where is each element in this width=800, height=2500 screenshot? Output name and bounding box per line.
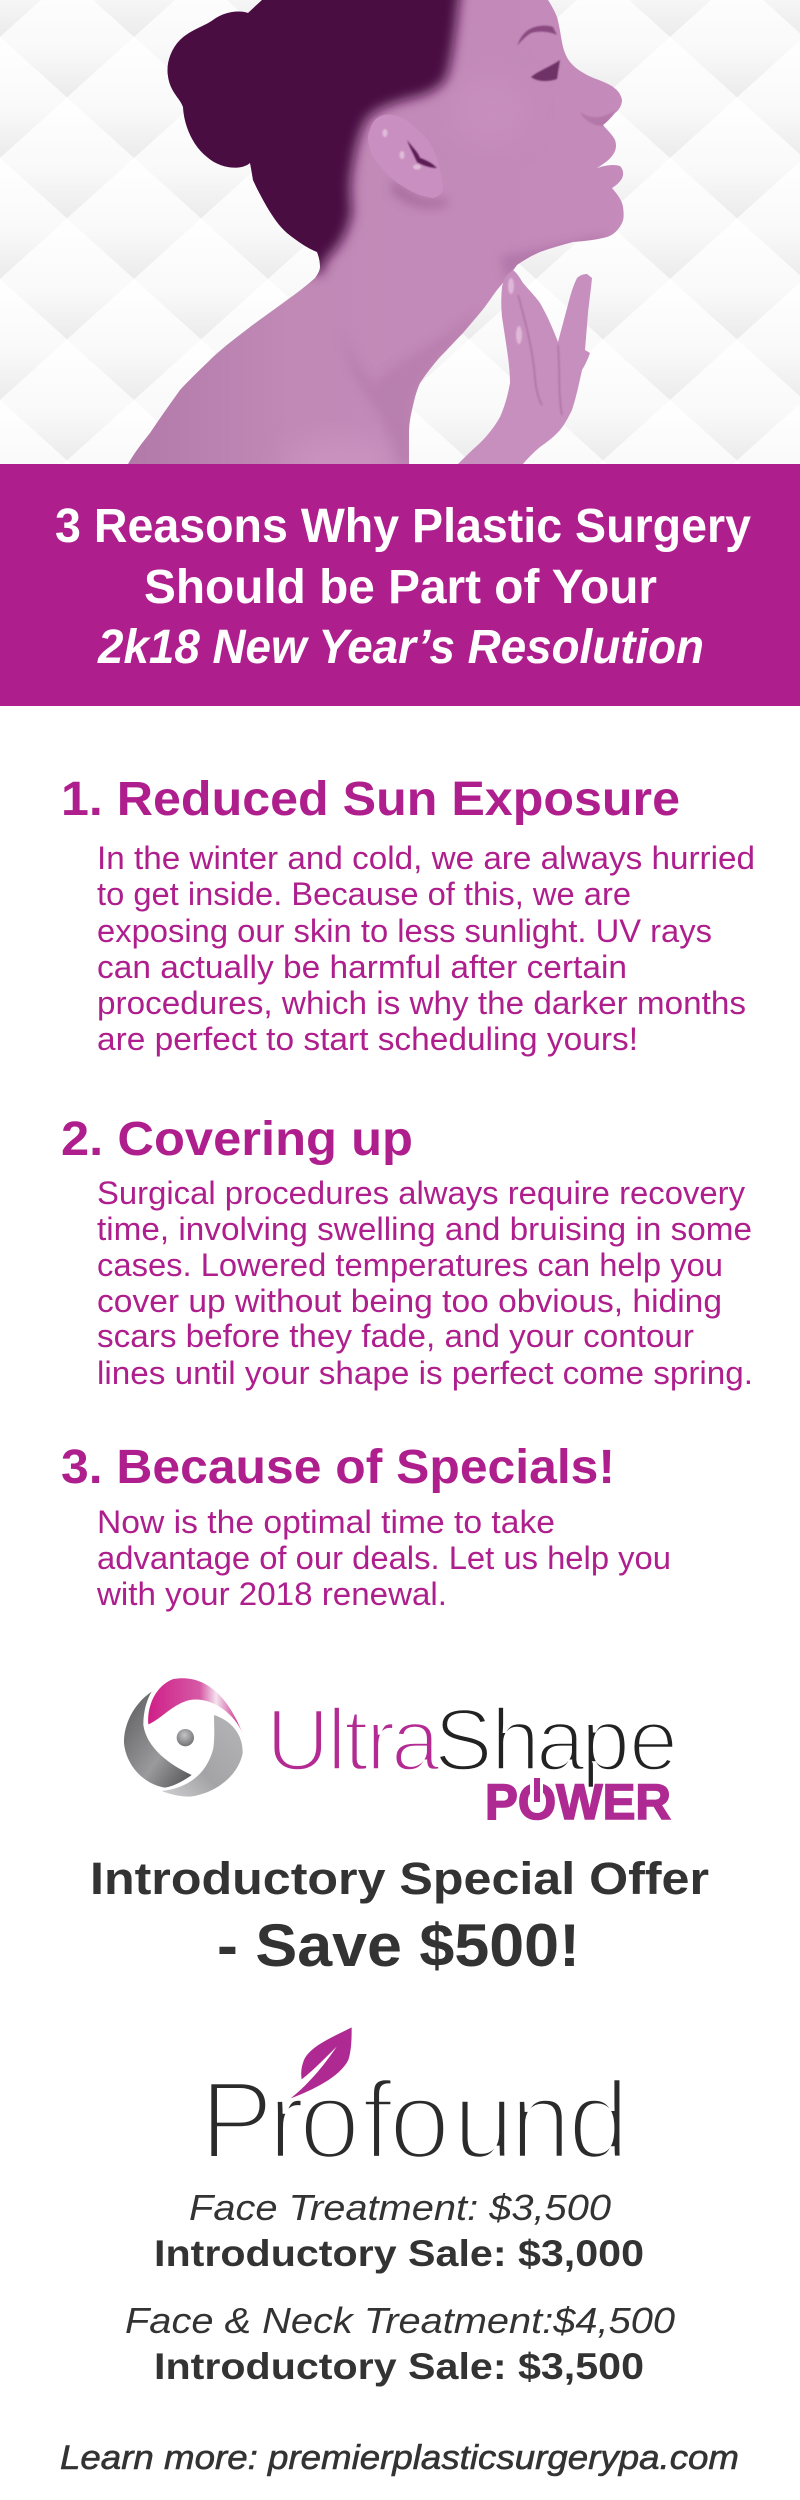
icon: power symbol on the O — [530, 1777, 543, 1805]
hero image: woman in profile on quilted background — [0, 0, 800, 487]
body: reason 3: Now is the optimal time to take — [97, 1504, 555, 1540]
body: reason 3: with your 2018 renewal. — [96, 1576, 447, 1612]
body: reason 2: cases. Lowered temperatures can help you — [97, 1247, 723, 1283]
title banner — [0, 464, 800, 706]
body: reason 1: are perfect to start scheduling yours! — [97, 1021, 638, 1057]
body: reason 2: cover up without being too obvious, hiding — [97, 1283, 722, 1319]
eye — [531, 60, 560, 81]
cheek highlight — [450, 75, 530, 145]
savings line: - Save $500! — [217, 1912, 580, 1979]
face introductory sale: Introductory Sale: $3,000 — [154, 2233, 644, 2274]
body: reason 3: advantage of our deals. Let us help you — [97, 1540, 671, 1576]
reason 1 — [61, 773, 755, 1057]
body: reason 1: can actually be harmful after certain — [97, 949, 627, 985]
neck crease shading — [362, 330, 466, 460]
body: reason 1: to get inside. Because of this, we are — [97, 876, 631, 912]
title text — [55, 500, 751, 674]
offer line: Introductory Special Offer — [90, 1853, 709, 1904]
illustration: woman's head and shoulders — [128, 0, 624, 464]
footer link: Learn more: premierplasticsurgerypa.com — [60, 2439, 739, 2477]
face treatment price: Face Treatment: $3,500 — [189, 2187, 611, 2228]
UltraShape offer — [90, 1853, 709, 1979]
body: reason 2: scars before they fade, and your contour — [97, 1318, 694, 1354]
body: reason 2: lines until your shape is perfect come spring. — [97, 1355, 753, 1391]
hair — [150, 0, 465, 275]
body: reason 3 — [96, 1504, 671, 1612]
wordmark: POWER: POWER — [485, 1774, 671, 1830]
Profound pricing — [125, 2187, 675, 2387]
body: reason 2: time, involving swelling and bruising in some — [97, 1211, 752, 1247]
icon: UltraShape swirl — [124, 1678, 243, 1797]
finger creases — [518, 295, 562, 415]
wordmark: Shape: Shape — [434, 1690, 678, 1789]
ear fold — [407, 140, 437, 168]
shoulder highlight — [320, 455, 360, 464]
title text: 3 Reasons Why Plastic Surgery — [55, 500, 751, 553]
hand — [458, 270, 592, 464]
face and neck treatment price: Face & Neck Treatment:$4,500 — [125, 2300, 675, 2341]
body: reason 2 — [97, 1175, 753, 1391]
wordmark: Profound: Profound — [200, 2059, 629, 2182]
body: reason 1: In the winter and cold, we are always hurried — [97, 840, 755, 876]
wordmark: Ultra: Ultra — [266, 1690, 440, 1789]
under-jaw shadow — [501, 236, 604, 276]
ear highlights — [382, 129, 421, 170]
body: reason 1: exposing our skin to less sunlight. UV rays — [97, 913, 712, 949]
eyebrow — [517, 26, 557, 46]
under-nose shadow — [581, 112, 614, 126]
nail highlights — [508, 278, 522, 344]
title text: Should be Part of Your — [144, 561, 657, 614]
reason 2 — [61, 1113, 753, 1391]
body: reason 1: procedures, which is why the darker months — [97, 985, 746, 1021]
ear — [368, 114, 443, 198]
heading: reason 2: 2. Covering up — [61, 1113, 413, 1166]
icon: leaf — [291, 2027, 352, 2098]
Profound logo — [200, 2027, 629, 2182]
heading: reason 3: 3. Because of Specials! — [61, 1441, 615, 1494]
reason 3 — [61, 1441, 671, 1612]
UltraShape Power logo — [124, 1678, 678, 1830]
heading: reason 1: 1. Reduced Sun Exposure — [61, 773, 680, 826]
body: reason 1 — [97, 840, 755, 1057]
title text: 2k18 New Year’s Resolution — [97, 621, 704, 674]
body: reason 2: Surgical procedures always require recovery — [97, 1175, 745, 1211]
ear shadow — [390, 180, 448, 208]
face and neck introductory sale: Introductory Sale: $3,500 — [154, 2346, 644, 2387]
